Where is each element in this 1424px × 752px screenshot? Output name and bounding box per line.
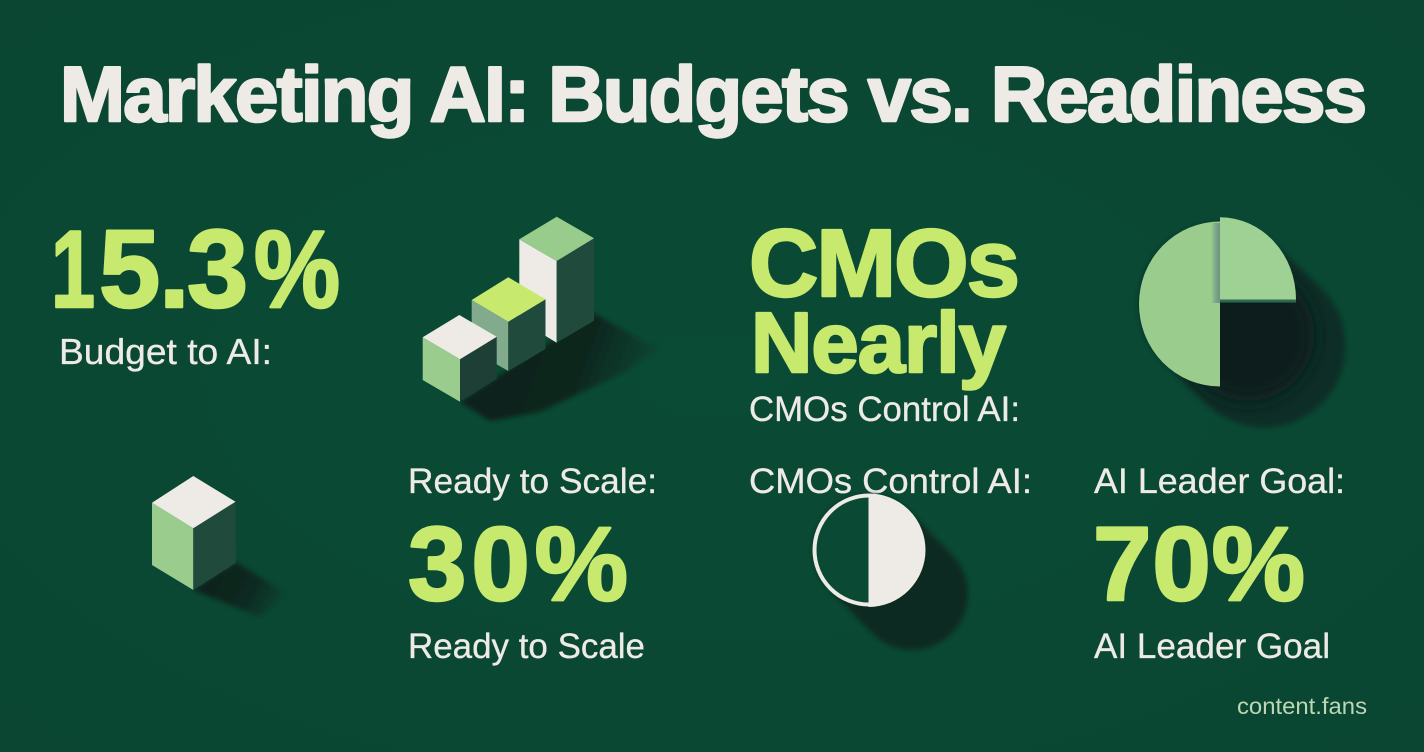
icon: rising isometric bars: [423, 217, 657, 421]
stat: 70% AI leader goal: 70%: [1093, 506, 1305, 623]
stat: 30% ready to scale: 30%: [408, 506, 628, 623]
stat: 15.3% budget to AI: [51, 207, 340, 372]
title: Marketing AI: Budgets vs. Readiness: [60, 50, 1367, 138]
stat: CMOs Nearly: CMOs Control AI:: [749, 390, 1020, 429]
stat: 30% ready to scale: [408, 462, 657, 666]
stat: 15.3% budget to AI: Budget to AI:: [59, 331, 272, 372]
stat: CMOs Nearly: CMOs: [749, 210, 1020, 317]
stat: 30% ready to scale: Ready to Scale:: [408, 462, 657, 501]
label: CMOs control AI: CMOs Control AI:: [749, 462, 1032, 501]
watermark: content.fans: [1237, 693, 1367, 719]
stat: CMOs Nearly: Nearly: [751, 296, 1006, 391]
stat: 15.3% budget to AI: %: [254, 207, 340, 330]
stat: 70% AI leader goal: AI Leader Goal: [1094, 627, 1330, 666]
stat: 30% ready to scale: Ready to Scale: [408, 627, 645, 666]
stat: 15.3% budget to AI: 1: [51, 208, 95, 331]
stat: CMOs Nearly: [749, 210, 1020, 429]
stat: 70% AI leader goal: [1093, 462, 1345, 666]
icon: pie chart with shadow: [1139, 217, 1314, 401]
icon: half-filled circle: [814, 494, 925, 607]
stat: 70% AI leader goal: AI Leader Goal:: [1094, 462, 1345, 501]
icon: single isometric cube: [152, 476, 287, 617]
stat: 15.3% budget to AI: 5.3: [99, 208, 248, 331]
